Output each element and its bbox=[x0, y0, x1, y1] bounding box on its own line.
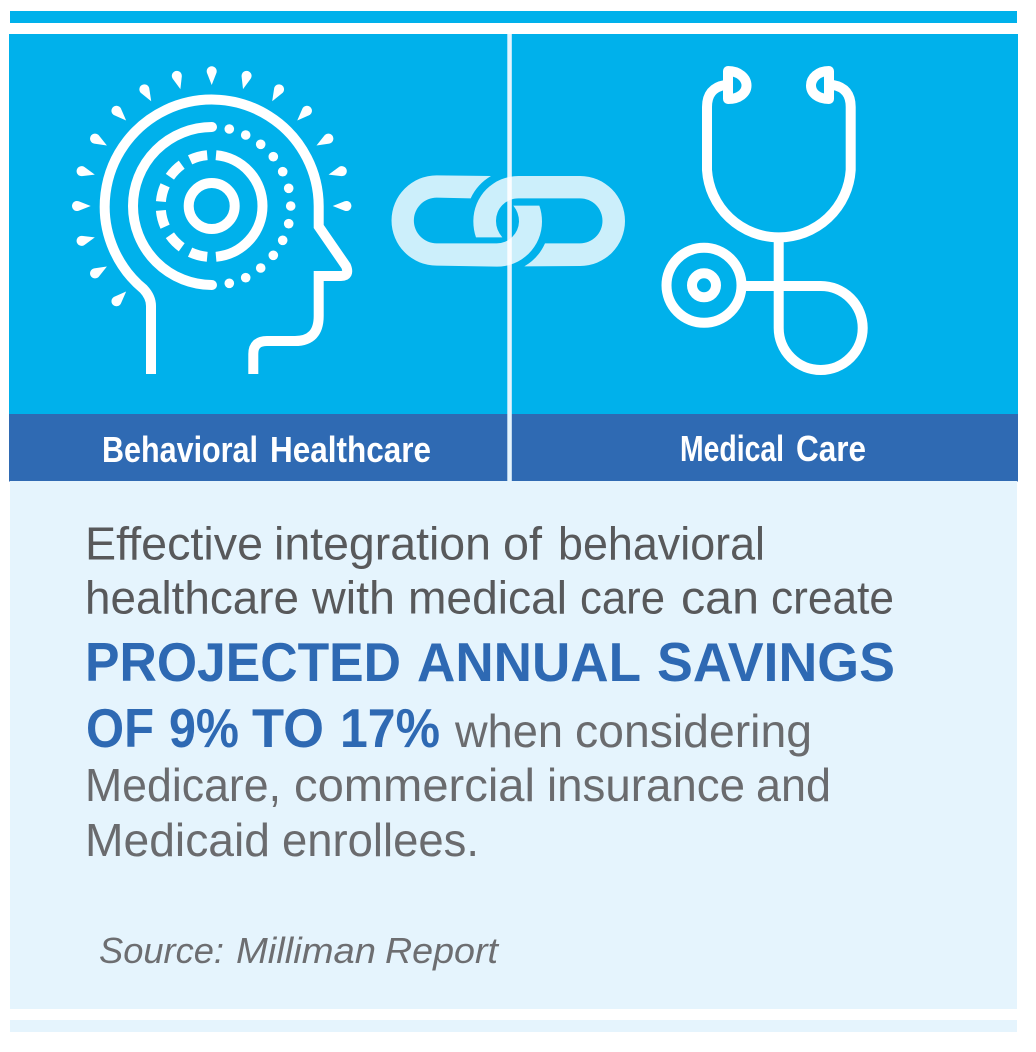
intro line 1 bbox=[85, 518, 765, 570]
closing line 3: Medicaid bbox=[85, 814, 270, 866]
center ring bbox=[189, 183, 235, 229]
left link bbox=[392, 175, 542, 267]
chest piece bbox=[666, 248, 742, 323]
highlight line 2: TO bbox=[252, 697, 324, 759]
intro line 1: Effective bbox=[85, 518, 263, 570]
highlight line 1: PROJECTED bbox=[85, 631, 401, 693]
intro line 1: of bbox=[503, 518, 542, 570]
bottom accent bar bbox=[10, 1020, 1017, 1032]
radiating drops bbox=[72, 66, 351, 308]
intro line 1: integration bbox=[274, 518, 491, 570]
label: medical care: Care bbox=[796, 428, 866, 469]
intro line 2: medical bbox=[408, 572, 567, 624]
binaural tube bbox=[707, 85, 851, 237]
closing line 1 bbox=[454, 705, 812, 757]
closing line 2: commercial bbox=[294, 759, 535, 811]
closing line 1: when bbox=[454, 705, 563, 757]
highlight line 2: 17% bbox=[340, 697, 440, 759]
intro line 2: care bbox=[580, 572, 665, 624]
inner solid arc bbox=[216, 155, 262, 257]
closing line 3: enrollees. bbox=[282, 814, 479, 866]
label: medical care: Medical bbox=[680, 428, 784, 469]
highlight line 1: SAVINGS bbox=[657, 631, 895, 693]
highlight line 2 bbox=[86, 697, 440, 759]
label: behavioral healthcare: Healthcare bbox=[270, 429, 431, 470]
intro line 2: create bbox=[771, 572, 894, 624]
left earpiece bbox=[728, 71, 746, 99]
highlight line 2: 9% bbox=[169, 697, 239, 759]
closing line 2: insurance bbox=[547, 759, 745, 811]
label: behavioral healthcare: Behavioral bbox=[102, 429, 258, 470]
icon: stethoscope bbox=[666, 71, 863, 370]
right link bbox=[473, 176, 625, 266]
highlight line 1 bbox=[85, 631, 895, 693]
closing line 2: Medicare, bbox=[85, 759, 281, 811]
intro line 2: can bbox=[681, 572, 759, 624]
body text bbox=[85, 518, 895, 866]
highlight line 2: OF bbox=[86, 697, 154, 759]
source note: Milliman bbox=[236, 930, 376, 971]
center divider bbox=[507, 34, 512, 482]
intro line 2: healthcare bbox=[85, 572, 299, 624]
top accent bar bbox=[10, 11, 1017, 23]
source note bbox=[99, 930, 500, 971]
source note: Report bbox=[385, 930, 500, 971]
right earpiece bbox=[811, 71, 829, 99]
label: behavioral healthcare bbox=[102, 429, 431, 470]
closing line 2: and bbox=[756, 759, 831, 811]
panel: light text area bbox=[10, 481, 1017, 1009]
outer arc bbox=[133, 127, 212, 285]
panel: label band bbox=[9, 414, 1018, 482]
intro line 1: behavioral bbox=[558, 518, 765, 570]
source note: Source: bbox=[99, 930, 224, 971]
dotted arc bbox=[224, 124, 296, 288]
intro line 2: with bbox=[311, 572, 395, 624]
icon: chain link bbox=[392, 175, 625, 267]
inner dashed arcs bbox=[161, 155, 207, 257]
closing line 2 bbox=[85, 759, 831, 811]
intro line 2 bbox=[85, 572, 894, 624]
closing line 3 bbox=[85, 814, 479, 866]
panel: blue icon area bbox=[9, 34, 1018, 414]
stem and loop bbox=[745, 242, 863, 370]
closing line 1: considering bbox=[575, 705, 812, 757]
head outline bbox=[105, 100, 347, 374]
icon: head with brain target bbox=[72, 66, 351, 374]
highlight line 1: ANNUAL bbox=[417, 631, 641, 693]
chest piece center bbox=[692, 273, 716, 297]
